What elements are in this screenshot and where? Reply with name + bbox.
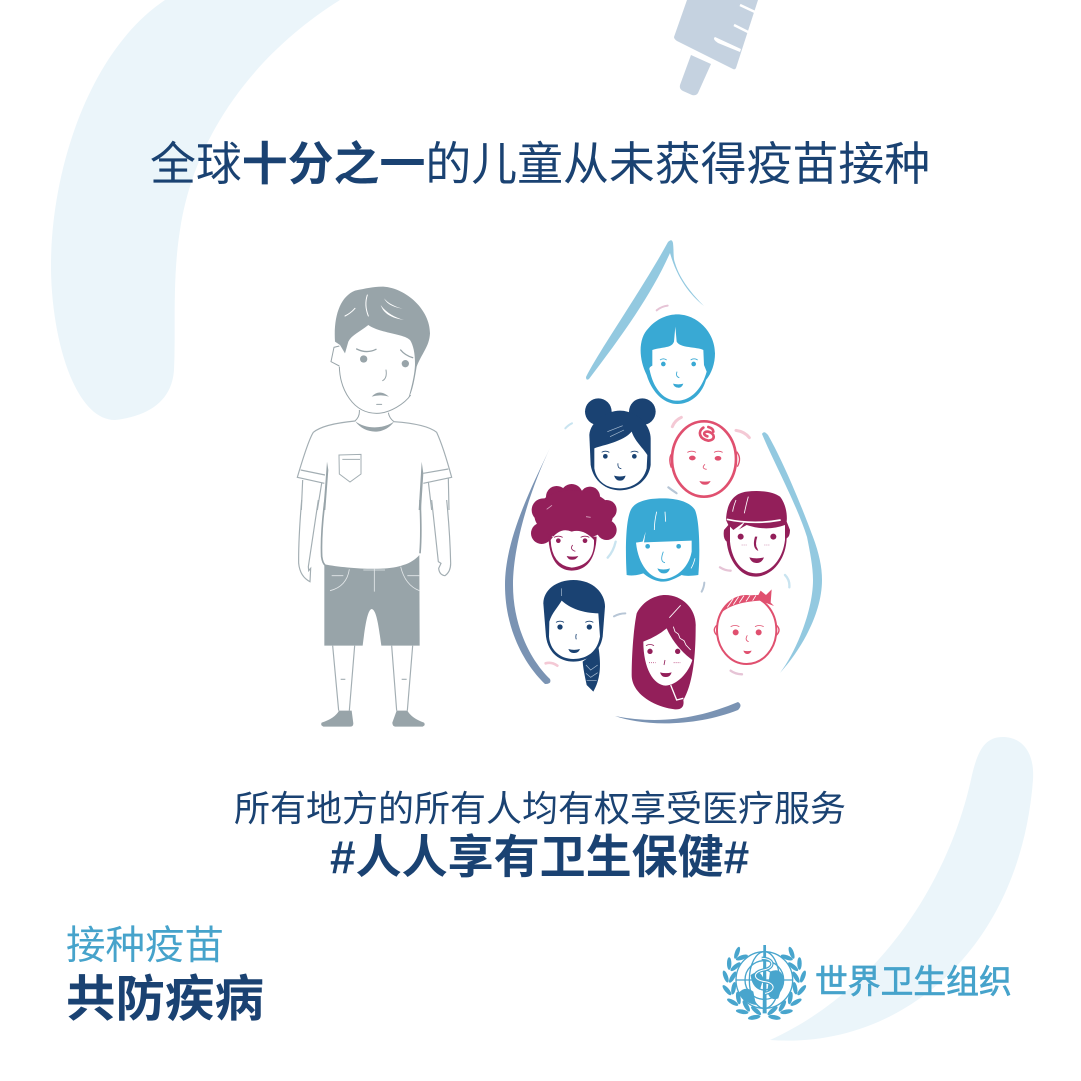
face: toddler with bow — [714, 589, 779, 664]
face: girl with cyan bob — [626, 498, 699, 582]
face: girl with hair buns — [585, 398, 656, 490]
decorative marks: upper — [565, 306, 749, 493]
laurel: right branch — [766, 946, 807, 1021]
illustration: sad boy — [297, 287, 452, 727]
WHO logo — [721, 945, 1012, 1021]
drop outline: top — [586, 240, 704, 380]
laurel: left branch — [721, 946, 762, 1021]
boy: head and upper body — [297, 287, 452, 510]
icon: syringe — [674, 0, 758, 95]
face: girl with braid — [543, 580, 605, 692]
background swoosh: bottom right — [770, 737, 1033, 1041]
decorative marks: lower — [546, 487, 789, 674]
title: 全球十分之一的儿童从未获得疫苗接种 — [150, 138, 930, 190]
WHO emblem — [721, 945, 807, 1021]
background swoosh: top left — [51, 0, 340, 420]
drop outline: bottom — [615, 702, 740, 723]
face: cyan child — [641, 314, 715, 404]
drop outline: right — [762, 432, 822, 673]
campaign slogan — [66, 924, 264, 1027]
face: baby — [670, 421, 740, 497]
WHO name: 世界卫生组织 — [815, 963, 1012, 1000]
slogan line 1: 接种疫苗 — [66, 924, 224, 968]
slogan line 2: 共防疾病 — [66, 972, 264, 1027]
drop outline: left — [505, 448, 550, 684]
faces: upper group — [565, 306, 749, 497]
hashtag: #人人享有卫生保健# — [330, 831, 749, 883]
face: girl with long hair — [632, 595, 696, 709]
boy: arms, shorts and legs — [299, 500, 451, 727]
illustration: water drop with faces — [505, 240, 822, 723]
face: child with afro — [531, 484, 617, 571]
subtitle line: 所有地方的所有人均有权享受医疗服务 — [234, 788, 846, 829]
face: boy with cap — [724, 491, 790, 577]
faces: lower group — [531, 484, 790, 709]
